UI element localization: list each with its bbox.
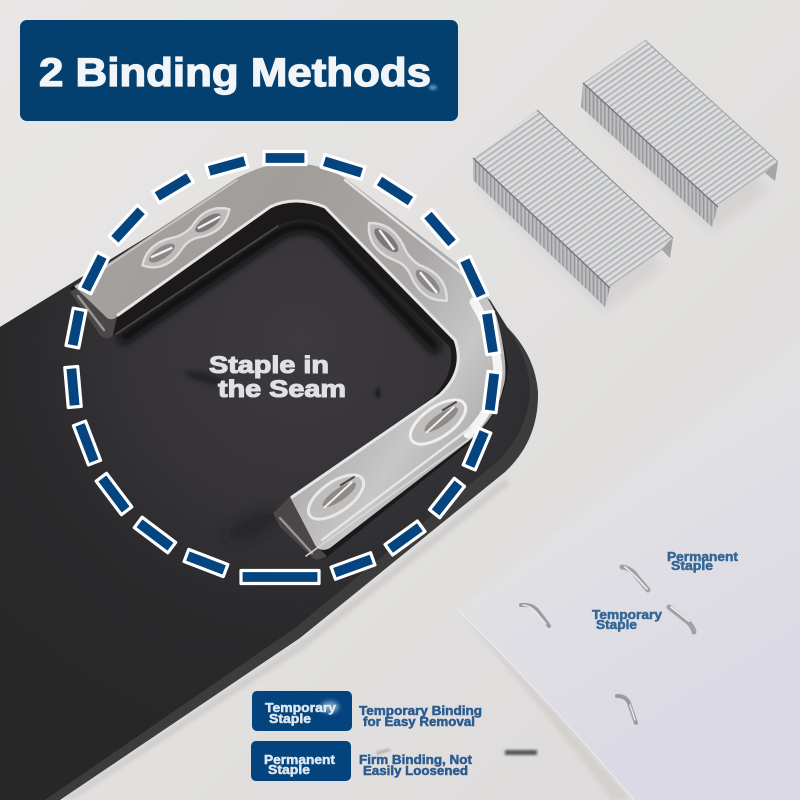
description: temporary binding: for Easy Removal — [363, 715, 475, 729]
icon: permanent staple upper — [622, 567, 648, 590]
badge: permanent staple: Staple — [268, 763, 310, 777]
label: permanent staple — [667, 550, 739, 573]
label: temporary staple: Staple — [596, 618, 637, 632]
description: temporary binding — [359, 704, 482, 729]
staple pit lower left — [301, 466, 371, 528]
description: firm binding — [359, 753, 473, 778]
icon: staple stack left — [473, 110, 673, 312]
badge: temporary staple: Temporary — [265, 701, 336, 715]
staple right tip — [273, 497, 327, 560]
callout: staple in the seam: Staple in — [209, 352, 329, 379]
staple inner shadow — [120, 226, 438, 350]
icon: staple stack right — [581, 40, 778, 232]
staple pit upper right — [360, 215, 454, 310]
label: permanent staple: Staple — [671, 559, 713, 573]
staple highlights — [76, 180, 498, 556]
label: temporary staple — [592, 608, 662, 632]
title text: 2 Binding Methods — [39, 51, 431, 95]
staple left tip — [70, 287, 117, 338]
badge: permanent staple — [251, 741, 351, 781]
black stapler base plate — [0, 180, 538, 800]
icon: temporary staple left — [521, 605, 549, 626]
description: temporary binding: Temporary Binding — [359, 704, 482, 718]
paper sheet with shadow — [458, 338, 800, 800]
legend: permanent staple — [251, 741, 473, 781]
callout: staple in the seam — [209, 352, 346, 403]
staple pit lower right — [403, 391, 473, 453]
title banner — [20, 20, 458, 121]
small staples in paper — [521, 567, 694, 723]
dashed highlight circle — [65, 152, 501, 584]
badge: permanent staple: Permanent — [264, 753, 336, 767]
label: permanent staple: Permanent — [667, 550, 739, 564]
icon: temporary staple right — [617, 696, 636, 723]
badge: temporary staple: Staple — [269, 712, 311, 726]
staple side wall — [70, 166, 508, 560]
staple stacks — [473, 40, 778, 312]
staple pit upper left — [137, 201, 236, 276]
badge: temporary staple — [252, 691, 352, 731]
label: temporary staple: Temporary — [592, 608, 662, 622]
staple type labels on paper — [592, 550, 739, 632]
blurred smudge marks — [376, 748, 537, 755]
description: firm binding: Firm Binding, Not — [359, 753, 473, 767]
metal staple close-up — [70, 163, 508, 560]
staple top face — [74, 163, 505, 550]
description: firm binding: Easily Loosened — [363, 764, 468, 778]
callout: staple in the seam: the Seam — [218, 376, 346, 403]
legend: temporary staple — [252, 691, 482, 731]
icon: permanent staple lower — [669, 607, 694, 632]
